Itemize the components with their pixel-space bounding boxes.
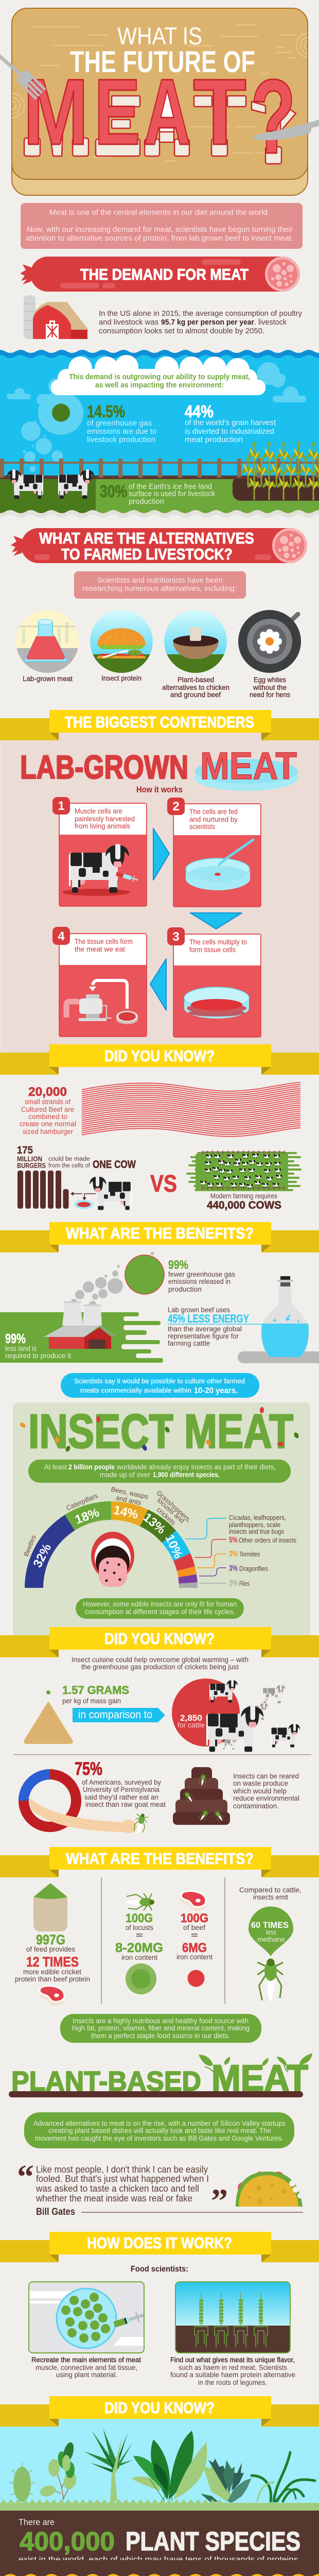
icons: small insects <box>19 1407 299 1452</box>
stat: 175 million burgers: 175 <box>17 1145 33 1156</box>
icon: green gas circle <box>125 1255 164 1294</box>
panel: find out what gives meat flavor: found a suitable haem protein alternative <box>170 2371 295 2379</box>
step 1 card: Muscle cells are <box>75 807 122 815</box>
icon: meat grinder <box>66 980 138 1024</box>
icon: waste pile with insects <box>173 1767 230 1825</box>
stat: fewer greenhouse gas: 99% <box>168 1258 188 1272</box>
step 1 card: 1 <box>58 799 65 813</box>
stat: less energy: farming cattle <box>168 1340 210 1347</box>
title word: meat with fat layer: M <box>23 59 88 164</box>
stat: 997g of feed: more edible cricket <box>23 1968 81 1976</box>
stat: 20,000 strands: sized hamburger <box>23 1128 73 1136</box>
stat: fewer greenhouse gas <box>168 1258 235 1293</box>
text pill: 2 billion people: 2 billion people <box>68 1463 115 1471</box>
stat: less land: required to produce it <box>5 1352 71 1360</box>
ribbon heading: did you know <box>0 1044 319 1075</box>
arrow: left <box>150 959 166 1010</box>
stat: greenhouse gas: 14.5% <box>87 402 125 421</box>
text: waste produce: reduce environmental <box>233 1794 299 1802</box>
step 1 card <box>52 797 147 906</box>
panel: environment sky <box>0 350 319 518</box>
chart: burger stacks <box>17 1171 69 1209</box>
chart: semicircle of edible insects: 10% <box>162 1532 185 1561</box>
chart: semicircle of edible insects: 32% <box>30 1541 54 1570</box>
stat: 440,000 cows: Modern farming requires <box>210 1192 277 1200</box>
step 2 card <box>167 798 261 907</box>
stat: 997g of feed <box>15 1883 90 2006</box>
ribbon heading: the biggest contenders: THE BIGGEST CONTENDERS <box>65 713 254 731</box>
text panel: alternatives: Scientists and nutritionists have been <box>97 576 223 585</box>
text: waste produce: Insects can be reared <box>233 1772 299 1780</box>
legend: insect categories: 3% <box>229 1564 238 1573</box>
stat: locusts iron content: 8-20MG <box>115 1941 163 1955</box>
plant: yucca <box>84 2428 133 2501</box>
stat: 60 times less methane: methane <box>257 1936 285 1943</box>
soil patch <box>233 476 319 501</box>
panel: lab-grown section background <box>1 718 319 1053</box>
stat: beef iron content: iron content <box>176 1953 212 1961</box>
stat: less energy: Lab grown beef uses <box>168 1306 230 1314</box>
panel: soil with stat: exist in the world, each of which may have tens of thousands of proteins. <box>19 2555 300 2564</box>
arrow: right <box>153 828 169 880</box>
chart: semicircle of edible insects <box>22 1485 198 1588</box>
stat: 440,000 cows <box>207 1192 281 1211</box>
panel: find out what gives meat flavor: such as haem in red meat. Scientists <box>179 2364 287 2371</box>
decorative clouds <box>7 362 306 472</box>
text: versus: VS <box>150 1170 177 1197</box>
stat: grain harvest: meat production <box>185 435 243 444</box>
chart: semicircle of edible insects: locusts and <box>156 1496 186 1524</box>
title <box>23 22 296 176</box>
stat: 20,000 strands <box>20 1085 76 1136</box>
icon: petri dish and pipette <box>186 840 253 890</box>
stat: less energy: 45% LESS ENERGY <box>168 1312 249 1325</box>
quote: bill gates: ” <box>211 2182 228 2220</box>
stat: land surface: production <box>129 497 164 506</box>
ribbon heading: did you know: DID YOU KNOW? <box>104 1047 215 1065</box>
column dividers <box>101 1877 225 2004</box>
stat: less land: 99% <box>5 1331 26 1346</box>
stat: 997g of feed: protein than beef protein <box>15 1975 90 1983</box>
plant: broad leaves <box>131 2431 207 2501</box>
chart: semicircle of edible insects: Grasshoppers, <box>155 1489 193 1524</box>
stat: 175 million burgers: MILLION <box>17 1155 42 1163</box>
icon: insect burger <box>90 610 153 674</box>
icon: petri dish behind title <box>194 759 298 791</box>
text pill: 2 billion people: worldwide already enjoy insects as part of their diets, <box>116 1463 276 1471</box>
text pill: 2 billion people: 1,900 different species. <box>153 1471 220 1479</box>
text: waste produce: which would help <box>233 1787 287 1795</box>
label: insect protein: Insect protein <box>101 674 141 682</box>
stat: fewer greenhouse gas: fewer greenhouse gas <box>168 1270 235 1278</box>
fence <box>0 459 319 479</box>
icon: farm land with smoke <box>0 1252 163 1363</box>
panel: recreate elements of meat: muscle, connective and fat tissue, <box>36 2364 137 2371</box>
ribbon heading: what are the benefits <box>0 1222 319 1252</box>
ribbon heading: what are the benefits insect <box>0 1847 319 1877</box>
stat: locusts iron content: 100G <box>126 1911 153 1925</box>
stat: grain harvest: of the world's grain harvest <box>185 418 276 427</box>
icons: plants <box>9 2428 315 2503</box>
chart: semicircle of edible insects: crickets <box>155 1505 178 1527</box>
panel: find out what gives meat flavor: Find out what gives meat its unique flavor, <box>170 2356 295 2364</box>
stat: beef iron content <box>176 1890 212 1987</box>
stat: 60 times less methane: 60 TIMES <box>251 1920 289 1930</box>
legend: insect categories: Cicadas, leafhoppers, <box>229 1514 286 1521</box>
stat: 175 million burgers: ONE COW <box>93 1159 136 1171</box>
stat: locusts iron content: iron content <box>121 1954 157 1961</box>
label: egg whites <box>250 675 290 699</box>
icon: cow, dish and arrows <box>70 1176 132 1210</box>
ribbon heading: how does it work <box>0 2232 319 2262</box>
stat: 440,000 cows: 440,000 COWS <box>207 1199 281 1211</box>
stat: grain harvest: is diverted to industrialized <box>185 427 274 436</box>
legend: insect categories: 2% <box>229 1579 238 1588</box>
heading: plant-based meat <box>9 2053 312 2099</box>
title word: meat with fat layer: E <box>94 59 140 164</box>
divider <box>13 1754 311 1755</box>
icon: knife <box>253 120 319 140</box>
panel: find out what gives meat flavor: in the roots of legumes. <box>198 2379 267 2386</box>
stat: fewer greenhouse gas: emissions released in <box>168 1278 231 1285</box>
callout: 10-20 years <box>61 1373 259 1398</box>
plant: cactus <box>9 2463 35 2502</box>
icon: mouth with ants <box>91 1532 134 1587</box>
text pill: advanced alternatives <box>24 2112 294 2148</box>
panel: find out what gives meat flavor <box>170 2282 295 2386</box>
title line: what is: WHAT IS <box>117 22 202 49</box>
heading banner: alternatives: TO FARMED LIVESTOCK? <box>61 546 233 563</box>
title word: meat with fat layer: A <box>144 59 191 164</box>
quote: bill gates <box>17 2158 303 2220</box>
ground with scalloped edge <box>0 479 319 518</box>
quote: bill gates: fooled. But that's just what happened when I <box>36 2174 209 2184</box>
heading banner: the demand for meat: THE DEMAND FOR MEAT <box>80 266 249 283</box>
stat: 2,850 for cattle <box>172 1679 300 1752</box>
text: us consumption: 95.7 kg per person per year <box>161 318 254 327</box>
text: waste produce: contamination. <box>233 1802 279 1810</box>
icon: taco <box>236 2172 303 2207</box>
step 2 card: scientists <box>189 823 215 831</box>
stat: 20,000 strands: small strands of <box>25 1098 70 1106</box>
stat: greenhouse gas <box>52 402 156 444</box>
stat: 60 times less methane: insects emit <box>253 1893 288 1901</box>
text: us consumption: . livestock <box>254 318 287 327</box>
text pill: nutritious: them a perfect staple food source in our diets. <box>91 2032 230 2040</box>
title word: meat with fat layer <box>23 58 296 176</box>
arrow: in comparison to: in comparison to <box>78 1709 152 1721</box>
stat: 60 times less methane: less <box>266 1928 276 1936</box>
text pill: life cycles <box>76 1598 244 1619</box>
title word: meat with fat layer: ? <box>251 58 296 176</box>
step 1 card: painlessly harvested <box>75 815 135 823</box>
label: plant-based alternatives: alternatives to chicken <box>162 683 229 691</box>
plant: branch <box>39 2441 78 2500</box>
stat: land surface <box>100 482 215 506</box>
stat: land surface: 30% <box>100 482 127 501</box>
label: plant-based alternatives: Plant-based <box>178 675 214 684</box>
icon: mushroom <box>164 610 227 673</box>
icon: frying pan with egg <box>238 610 301 673</box>
text: food scientists: Food scientists: <box>131 2265 188 2274</box>
ribbon heading: did you know plants <box>0 2396 319 2427</box>
icon: barn and silo <box>24 295 88 339</box>
stat: locusts iron content: of locusts <box>126 1924 153 1931</box>
plant: grass curls <box>252 2452 315 2501</box>
label: plant-based alternatives: and ground beef <box>170 690 221 699</box>
text panel: alternatives <box>74 571 246 599</box>
text pill: 2 billion people: made up of over <box>100 1471 151 1479</box>
stat: less land <box>5 1331 71 1360</box>
text pill: nutritious: Insects are a highly nutritious and healthy food source with <box>73 2017 249 2025</box>
text pill: nutritious <box>60 2014 261 2043</box>
step 3 card: 3 <box>172 930 180 944</box>
text pill: advanced alternatives: movement has caught the eye of investors such as Bill Gates and Google Ventures. <box>35 2134 283 2142</box>
chart: semicircle of edible insects: Bees, wasps <box>110 1485 149 1501</box>
stat: beef iron content: 6MG <box>182 1941 207 1955</box>
panel: plant species background <box>0 2411 319 2512</box>
stat: fewer greenhouse gas: production <box>168 1285 202 1293</box>
chart: semicircle of edible insects: Caterpillars <box>65 1492 99 1512</box>
stat: less energy: than the average global <box>168 1325 242 1333</box>
intro text panel: Meat is one of the central elements in our diet around the world. <box>49 209 270 217</box>
stat: greenhouse gas: emissions are due to <box>87 427 156 436</box>
text: how it works: How it works <box>136 785 183 794</box>
heading: lab-grown meat <box>20 744 298 791</box>
stat: 175 million burgers <box>17 1145 136 1210</box>
stat: 175 million burgers: could be made <box>48 1156 90 1162</box>
step 3 card <box>167 927 261 1037</box>
label: egg whites: need for hens <box>250 690 290 699</box>
cows in field <box>7 469 94 499</box>
legend: insect categories: Termites <box>239 1550 260 1558</box>
arrow: down <box>190 913 242 929</box>
stat: 2,850 for cattle: 2,850 <box>180 1713 202 1723</box>
title line: the future of: THE FUTURE OF <box>70 45 255 79</box>
step 2 card: The cells are fed <box>189 808 238 816</box>
heading: plant-based meat: MEAT <box>211 2058 308 2099</box>
stat: 2,850 for cattle: for cattle <box>178 1721 205 1729</box>
ribbon heading: what are the benefits insect: WHAT ARE THE BENEFITS? <box>66 1850 254 1868</box>
chart: 75 percent donut with arm: University of Pennsylvania <box>83 1786 160 1793</box>
heading banner: the demand for meat <box>20 257 300 292</box>
stat: 20,000 strands: create one normal <box>20 1120 76 1128</box>
quote: bill gates: Like most people, I don't think I can be easily <box>36 2164 208 2175</box>
stat: 20,000 strands: Cultured Beef are <box>21 1106 74 1113</box>
panel: recreate elements of meat: Recreate the main elements of meat <box>31 2356 141 2364</box>
stat: 1.57 grams <box>24 1684 129 1744</box>
ribbon heading: how does it work: HOW DOES IT WORK? <box>87 2234 232 2252</box>
step 4 card: 4 <box>58 929 65 943</box>
legend: insect categories: Flies <box>239 1580 250 1587</box>
stat: 60 times less methane <box>239 1886 302 2003</box>
heading: plant-based meat: PLANT-BASED <box>11 2066 201 2097</box>
panel: soil with stat: 400,000 <box>20 2527 115 2556</box>
stat: beef iron content: of beef <box>183 1924 205 1931</box>
chart: semicircle of edible insects: 18% <box>73 1505 101 1527</box>
stat: grain harvest <box>185 402 276 444</box>
callout: 10-20 years: 10-20 years. <box>194 1386 238 1395</box>
icon: cow field <box>187 1150 300 1190</box>
text: us consumption: In the US alone in 2015, the average consumption of poultry <box>99 309 302 318</box>
stat: 20,000 strands: combined to <box>28 1113 67 1121</box>
stat: 20,000 strands: 20,000 <box>28 1085 67 1099</box>
panel: conclusion and sources <box>0 2560 319 2576</box>
heading banner: alternatives <box>11 528 307 563</box>
label: egg whites: Egg whites <box>254 675 286 684</box>
legend: insect categories: Dragonflies <box>239 1565 268 1572</box>
intro text panel: Now, with our increasing demand for meat, scientists have begun turning their <box>27 226 293 234</box>
label: plant-based alternatives <box>162 675 229 699</box>
text: us consumption: and livestock was <box>99 318 158 327</box>
chart: semicircle of edible insects: 14% <box>112 1503 139 1522</box>
step 3 card: form tissue cells <box>189 946 236 954</box>
legend: insect categories: 5% <box>229 1536 238 1545</box>
ground: grass strip <box>0 2499 319 2511</box>
legend: insect categories <box>185 1514 296 1588</box>
panel: recreate elements of meat: using plant material. <box>56 2371 117 2379</box>
callout: 10-20 years: Scientists say it would be possible to culture other farmed <box>74 1377 245 1385</box>
chart: semicircle of edible insects: Beetles <box>22 1534 38 1557</box>
step 2 card: and nurtured by <box>189 816 238 823</box>
legend: insect categories: insects and true bugs <box>229 1528 284 1535</box>
text: us consumption: consumption looks set to almost double by 2050. <box>99 327 264 335</box>
icon: fork <box>0 55 46 100</box>
chart: 75 percent donut with arm: of Americans, surveyed by <box>82 1778 161 1786</box>
stat: 175 million burgers: from the cells of <box>48 1163 91 1169</box>
quote: bill gates: was asked to taste a chicken taco and tell <box>36 2183 199 2194</box>
legend: insect categories: Other orders of insects <box>239 1536 296 1544</box>
stat: 1.57 grams: 1.57 GRAMS <box>62 1684 129 1697</box>
stat: land surface: of the Earth's ice free land <box>129 482 212 491</box>
panel: soil with stat <box>0 2511 319 2573</box>
text: waste produce: on waste produce <box>233 1780 288 1787</box>
chart: semicircle of edible insects: and ants <box>115 1494 142 1506</box>
text pill: 2 billion people <box>28 1460 291 1483</box>
text pill: 2 billion people: At least <box>44 1463 67 1471</box>
stat: 997g of feed: of feed provides <box>26 1945 75 1953</box>
text: us consumption <box>99 309 302 335</box>
icon: flask on table <box>238 1276 319 1363</box>
stat: 997g of feed: 997G <box>36 1932 65 1947</box>
text: waste produce <box>233 1772 299 1810</box>
stat: 60 times less methane: Compared to cattle, <box>239 1886 302 1894</box>
chart: 75 percent donut with arm: 75% <box>75 1759 102 1779</box>
text pill: nutritious: high fat, protein, vitamin, fiber and mineral content, making <box>72 2024 250 2032</box>
text: insect cuisine: Insect cuisine could help overcome global warming – with <box>72 1656 249 1664</box>
ribbon heading: the biggest contenders <box>0 710 319 740</box>
panel: insect meat <box>13 1402 310 1635</box>
intro text panel <box>21 203 303 249</box>
panel: soil with stat: There are <box>19 2517 55 2527</box>
text pill: life cycles: However, some edible insects are only fit for human <box>83 1600 237 1608</box>
step 4 card: The tissue cells form <box>75 938 133 945</box>
legend: insect categories: 3% <box>229 1550 238 1558</box>
header cutting board <box>0 8 319 195</box>
text pill: life cycles: consumption at different stages of their life cycles. <box>85 1608 235 1616</box>
cloud with text: as well as impacting the environment: <box>95 381 224 389</box>
chart: 75 percent donut with arm: insect than raw goat meat <box>85 1801 166 1808</box>
ribbon heading: did you know insect <box>0 1627 319 1657</box>
panel: recreate elements of meat <box>29 2282 145 2379</box>
icon: petri dish of cells <box>184 987 249 1019</box>
callout: 10-20 years: meats commercially available within <box>80 1386 191 1394</box>
stat: 1.57 grams: per kg of mass gain <box>62 1697 121 1705</box>
heading: lab-grown meat: MEAT <box>200 744 297 787</box>
stat: less energy: representative figure for <box>168 1332 239 1340</box>
icon: cow with syringe <box>62 844 139 896</box>
text pill: advanced alternatives: creating plant based dishes will actually look and taste like real meat. The <box>48 2127 271 2134</box>
heading: lab-grown meat: LAB-GROWN <box>20 749 188 786</box>
chart: 75 percent donut with arm: said they'd rather eat an <box>84 1793 158 1801</box>
cloud with text: This demand is outgrowing our ability to supply meat, <box>69 373 250 381</box>
quote: bill gates: Bill Gates <box>36 2207 75 2217</box>
cloud with text <box>51 355 265 395</box>
text panel: alternatives: researching numerous alternatives, including: <box>82 584 237 593</box>
text: insect cuisine: the greenhouse gas production of crickets being just <box>81 1663 239 1671</box>
stat: less land: less land is <box>5 1345 37 1352</box>
stat: greenhouse gas: livestock production <box>87 435 155 444</box>
ribbon heading: did you know insect: DID YOU KNOW? <box>104 1630 215 1648</box>
text pill: advanced alternatives: Advanced alternatives to meat is on the rise, with a number of Silicon Valley startups <box>33 2120 286 2127</box>
step 1 card: from living animals <box>75 822 130 830</box>
ribbon heading: did you know plants: DID YOU KNOW? <box>104 2399 215 2417</box>
chart: semicircle of edible insects: 13% <box>140 1510 168 1537</box>
step 4 card: the meat we eat <box>75 945 125 953</box>
quote: bill gates: “ <box>17 2158 34 2196</box>
ribbon heading: what are the benefits: WHAT ARE THE BENEFITS? <box>66 1224 254 1242</box>
quote: bill gates: whether the meat inside was real or fake <box>36 2193 192 2204</box>
stat: beef iron content: 100G <box>181 1911 208 1925</box>
corn field <box>241 442 319 500</box>
intro text panel: attention to alternative sources of protein, from lab grown beef to insect meat. <box>26 234 293 243</box>
stat: 175 million burgers: BURGERS <box>17 1161 46 1170</box>
legend: insect categories: planthoppers, scale <box>229 1521 280 1529</box>
step 3 card: The cells multiply to <box>189 938 247 946</box>
stat: 997g of feed: 12 TIMES <box>26 1954 79 1970</box>
stat: locusts iron content <box>115 1893 163 1994</box>
chart: muscle strands <box>82 1082 300 1137</box>
text: insect cuisine <box>72 1656 249 1671</box>
step 4 card <box>52 927 147 1037</box>
plant: serrated leaves <box>201 2459 252 2503</box>
stat: grain harvest: 44% <box>185 402 214 421</box>
chart: 75 percent donut with arm <box>24 1759 166 1835</box>
label: lab-grown meat: Lab-grown meat <box>23 674 73 683</box>
icon: lab-grown meat flask <box>16 610 79 673</box>
step 2 card: 2 <box>172 800 180 814</box>
stat: land surface: surface is used for livestock <box>129 489 215 498</box>
heading banner: alternatives: WHAT ARE THE ALTERNATIVES <box>39 530 254 547</box>
stat: greenhouse gas: of greenhouse gas <box>87 419 152 428</box>
stat: less energy <box>168 1306 262 1347</box>
label: egg whites: without the <box>253 683 287 691</box>
title word: meat with fat layer: T <box>193 59 246 164</box>
